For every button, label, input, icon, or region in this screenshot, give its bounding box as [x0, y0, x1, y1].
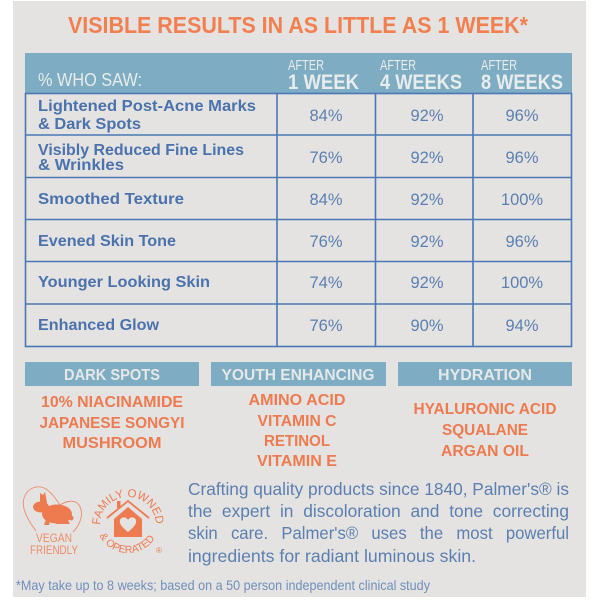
row: smoothed texture: 100%	[501, 191, 543, 209]
heading: YOUTH ENHANCING	[222, 367, 374, 384]
icon: family owned	[92, 489, 164, 555]
row: fine lines: 96%	[505, 149, 539, 167]
header label: % WHO SAW:	[38, 70, 142, 90]
row: smoothed texture	[38, 191, 543, 209]
column header: 4 weeks: 4 WEEKS	[380, 71, 462, 94]
panel: hydration	[398, 362, 572, 460]
brand paragraph: the expert in discoloration and tone correcting	[188, 501, 569, 521]
row: lightened marks: & Dark Spots	[38, 116, 141, 133]
heart in house	[120, 517, 136, 532]
column header: 4 weeks: AFTER	[380, 57, 416, 74]
registered mark: ®	[156, 546, 162, 555]
ingredients: ARGAN OIL	[441, 443, 529, 460]
row: younger looking: Younger Looking Skin	[38, 274, 210, 291]
row: lightened marks: 92%	[410, 107, 444, 125]
row: skin tone	[38, 233, 539, 251]
chimney	[117, 501, 120, 508]
brand paragraph: ingredients for radiant luminous skin.	[188, 546, 476, 566]
ingredients: SQUALANE	[442, 422, 528, 439]
ingredients: 10% NIACINAMIDE	[41, 394, 183, 411]
row: skin tone: Evened Skin Tone	[38, 233, 176, 250]
row: enhanced glow: Enhanced Glow	[38, 317, 160, 334]
brand paragraph	[188, 479, 569, 566]
ingredients: AMINO ACID	[248, 392, 346, 409]
results table	[25, 53, 572, 346]
column header: 1 week: AFTER	[288, 57, 324, 74]
row: fine lines	[38, 142, 539, 174]
rabbit	[33, 492, 74, 525]
icon: vegan friendly: FRIENDLY	[30, 543, 78, 557]
column header: 8 weeks: AFTER	[481, 57, 517, 74]
row: enhanced glow: 76%	[309, 317, 343, 335]
row: fine lines: 92%	[410, 149, 444, 167]
row: enhanced glow: 94%	[505, 317, 539, 335]
ingredients: VITAMIN E	[257, 453, 337, 470]
column header: 1 week: 1 WEEK	[288, 71, 359, 94]
row: lightened marks	[38, 98, 539, 133]
heading: DARK SPOTS	[64, 367, 160, 384]
row: smoothed texture: 84%	[309, 191, 343, 209]
column header: 1 week	[288, 57, 359, 94]
heading	[398, 362, 572, 386]
row: enhanced glow	[38, 317, 539, 335]
curved text top: FAMILY OWNED	[92, 489, 164, 524]
ingredients: VITAMIN C	[258, 413, 337, 430]
row: younger looking: 100%	[501, 274, 543, 292]
row: skin tone: 76%	[309, 233, 343, 251]
panel: dark spots	[25, 362, 199, 452]
row: younger looking	[38, 274, 543, 292]
ingredients: RETINOL	[264, 433, 330, 450]
row: skin tone: 96%	[505, 233, 539, 251]
heading: HYDRATION	[438, 367, 532, 384]
column header: 4 weeks	[380, 57, 462, 94]
row: smoothed texture: 92%	[410, 191, 444, 209]
house	[114, 507, 142, 537]
row: lightened marks: Lightened Post-Acne Marks	[38, 98, 256, 115]
curved text bottom: & OPERATED	[100, 534, 154, 554]
footnote: *May take up to 8 weeks; based on a 50 person independent clinical study	[16, 577, 430, 593]
heading	[25, 362, 199, 386]
row: lightened marks: 84%	[309, 107, 343, 125]
row: fine lines: & Wrinkles	[38, 157, 124, 174]
ingredients	[248, 392, 346, 470]
brand paragraph: skin care. Palmer's® uses the most powerful	[188, 523, 569, 543]
table header band	[25, 53, 572, 93]
ingredients: HYALURONIC ACID	[414, 401, 556, 418]
row: younger looking: 92%	[410, 274, 444, 292]
table grid	[25, 93, 572, 346]
ingredients	[40, 394, 184, 452]
row: fine lines: Visibly Reduced Fine Lines	[38, 142, 244, 159]
panel: youth enhancing	[211, 362, 386, 470]
row: fine lines: 76%	[309, 149, 343, 167]
column header: 8 weeks	[481, 57, 563, 94]
row: lightened marks: 96%	[505, 107, 539, 125]
brand paragraph: Crafting quality products since 1840, Palmer's® is	[188, 479, 569, 499]
heart outline	[23, 487, 81, 532]
title: VISIBLE RESULTS IN AS LITTLE AS 1 WEEK*	[68, 12, 528, 38]
column header: 8 weeks: 8 WEEKS	[481, 71, 563, 94]
ingredients: JAPANESE SONGYI	[40, 415, 184, 432]
row: skin tone: 92%	[410, 233, 444, 251]
row: enhanced glow: 90%	[410, 317, 444, 335]
ingredients	[414, 401, 556, 460]
vegan label: VEGAN	[36, 531, 72, 545]
heading	[211, 362, 386, 386]
row: younger looking: 74%	[309, 274, 343, 292]
icon: vegan friendly	[23, 487, 81, 557]
row: smoothed texture: Smoothed Texture	[38, 191, 184, 208]
ingredients: MUSHROOM	[62, 435, 162, 452]
roof	[107, 501, 149, 518]
